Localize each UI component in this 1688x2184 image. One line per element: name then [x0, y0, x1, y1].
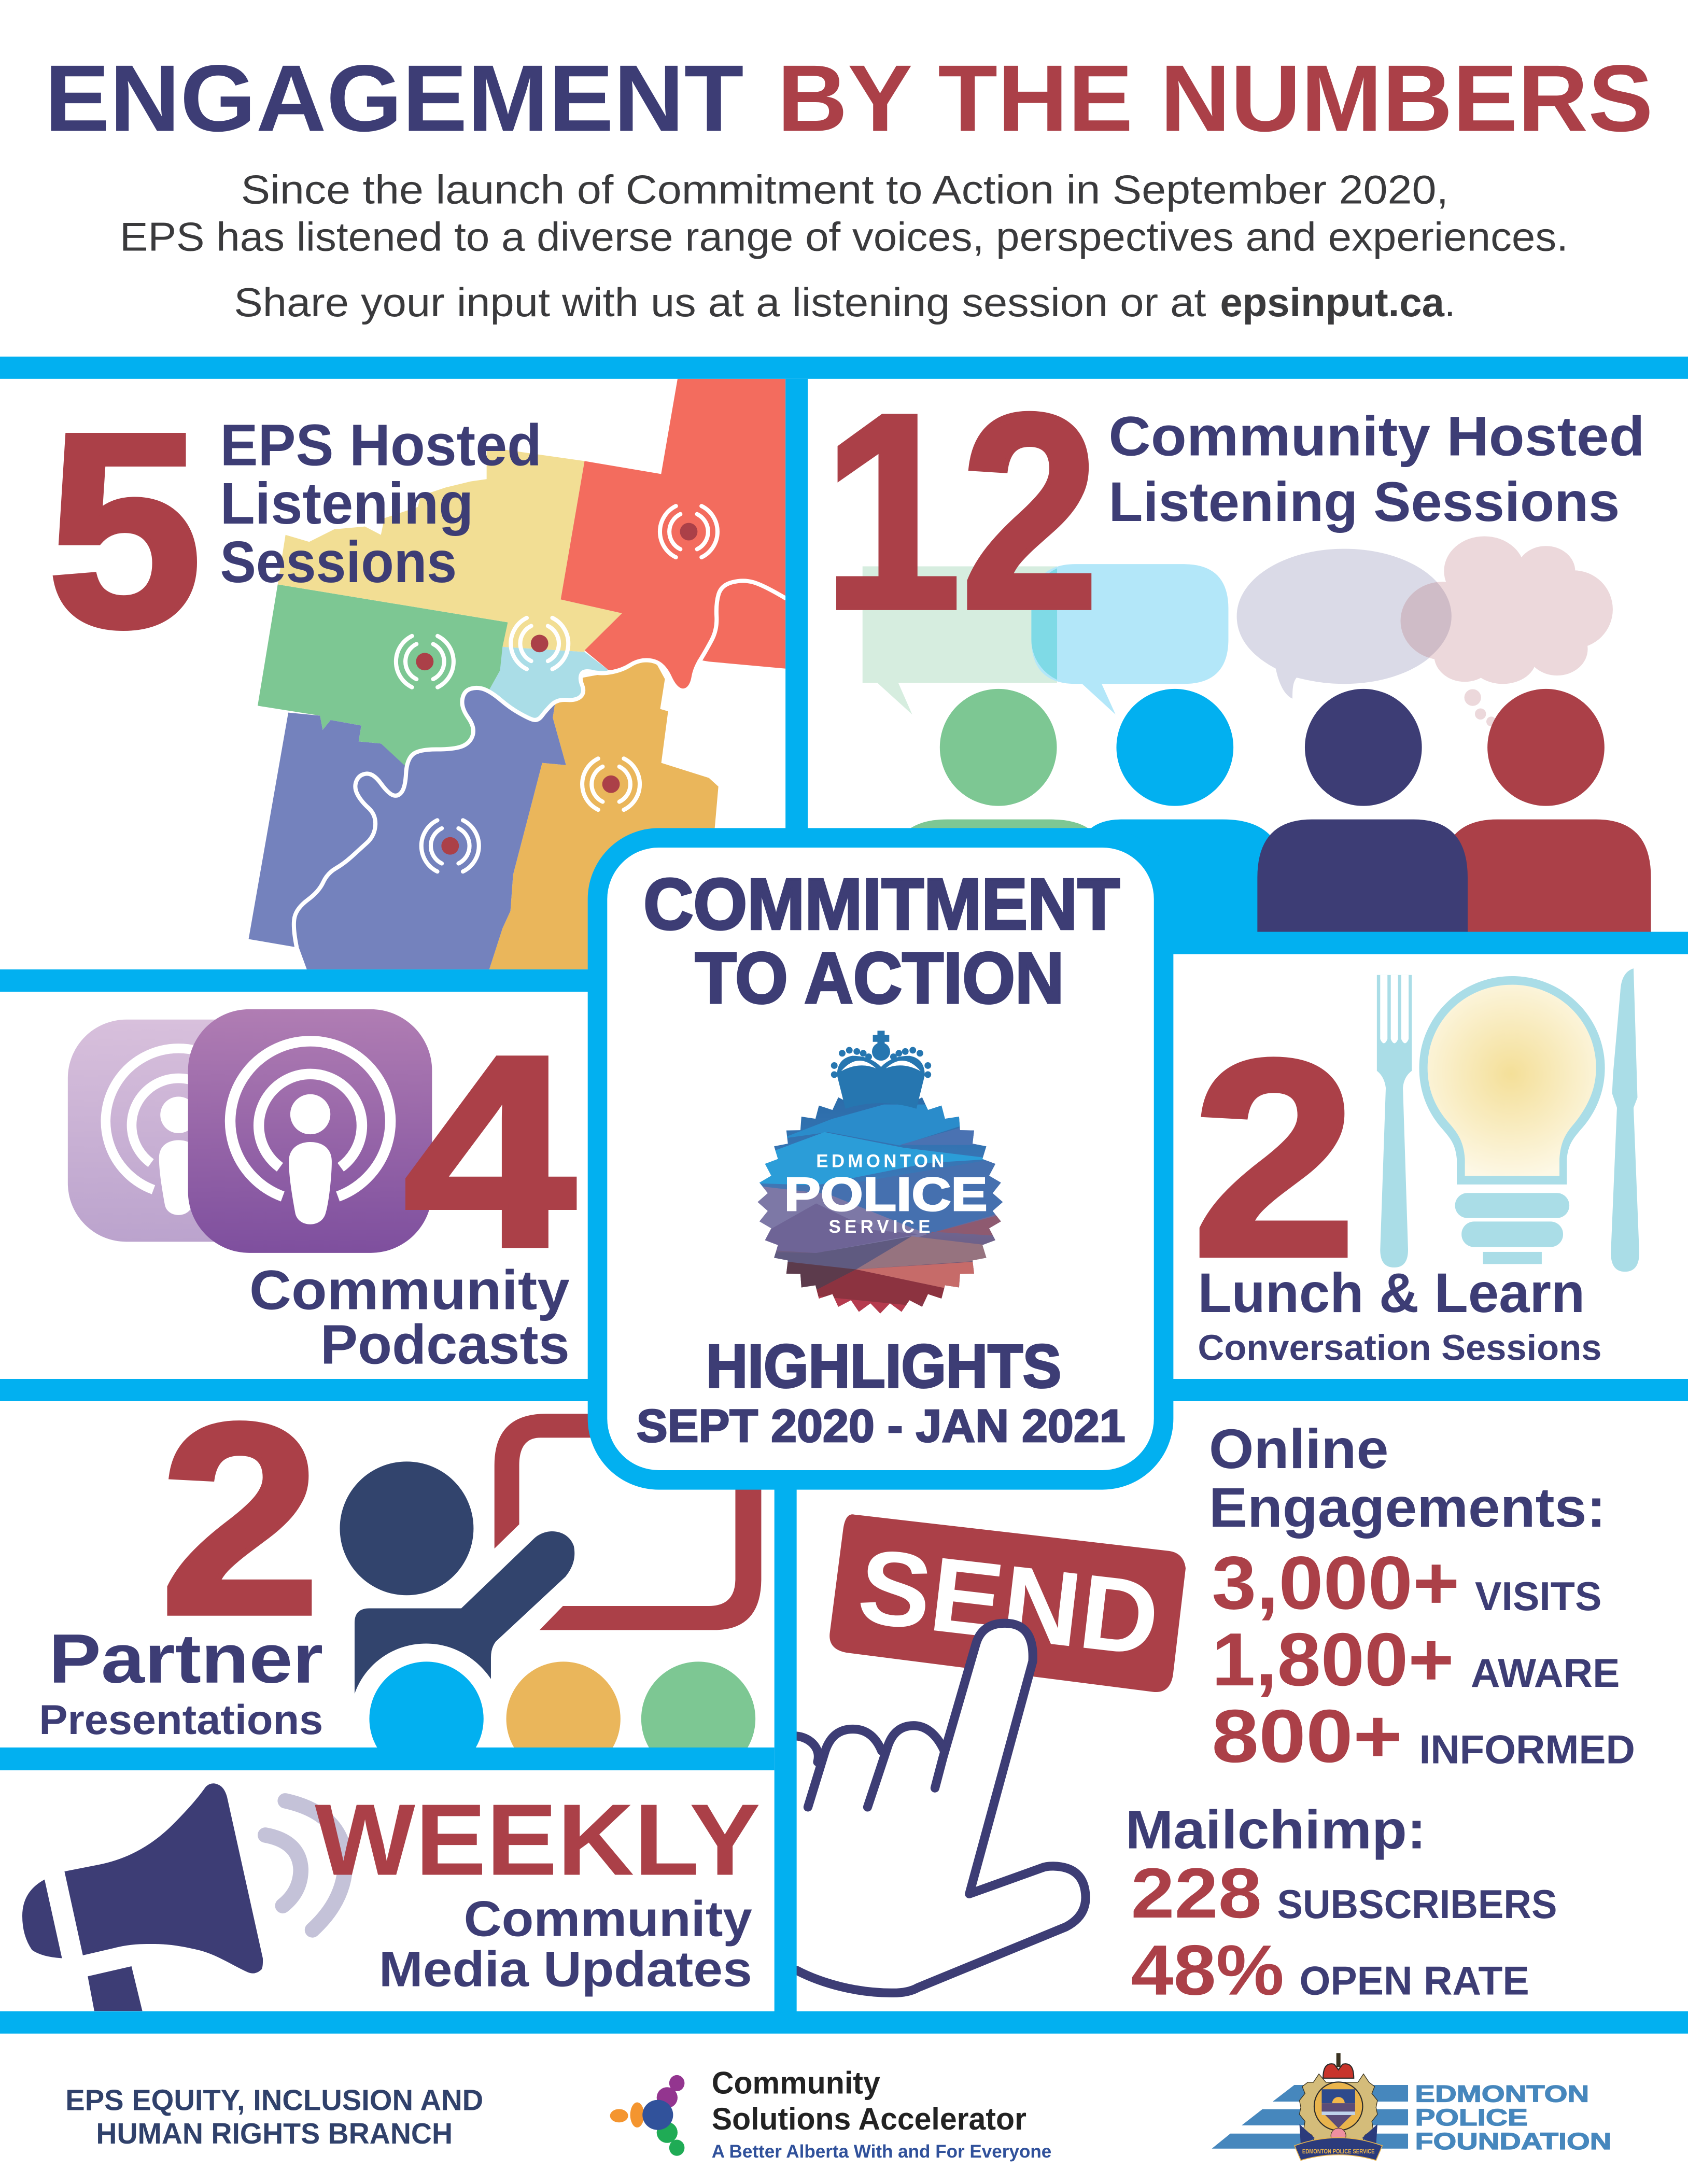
logo wordmark: SERVICE — [828, 1217, 931, 1237]
intro text: EPS has listened to a diverse range of voices, perspectives and experiences. — [120, 214, 1568, 260]
stat: subscribers: SUBSCRIBERS — [1277, 1881, 1557, 1927]
logo badge — [752, 1087, 1010, 1323]
number 4: 4 — [404, 1000, 577, 1303]
heading: online engagements: Engagements: — [1209, 1476, 1606, 1539]
intro text: Share your input with us at a listening session or at — [234, 279, 1206, 325]
river — [294, 581, 785, 947]
footer: EPS branch: EPS EQUITY, INCLUSION AND — [65, 2084, 483, 2117]
logo crown — [831, 1031, 931, 1109]
intro text: epsinput.ca — [1220, 279, 1445, 325]
footer: Community Solutions Accelerator logo — [610, 2065, 1051, 2162]
stat: aware — [1212, 1617, 1620, 1701]
panel: partner presentations — [41, 1414, 761, 1748]
label: EPS hosted listening sessions: Sessions — [220, 529, 457, 595]
intro text: Since the launch of Commitment to Action in September 2020, — [241, 166, 1448, 212]
logo wordmark — [784, 1151, 988, 1237]
heading: commitment to action — [643, 864, 1120, 1019]
label: EPS hosted listening sessions: EPS Hosted — [220, 412, 542, 477]
icon: presentation screen — [495, 1414, 761, 1630]
stat: aware: AWARE — [1471, 1650, 1620, 1696]
label: partner presentations — [39, 1620, 323, 1743]
label: partner presentations: Presentations — [39, 1697, 323, 1743]
title — [45, 46, 1653, 151]
label: community podcasts — [249, 1259, 570, 1375]
icon: location signal — [421, 820, 479, 871]
stat: visits — [1212, 1541, 1601, 1625]
panel: EPS hosted listening sessions — [47, 375, 785, 969]
stat: open rate: OPEN RATE — [1299, 1958, 1529, 2004]
icon: presenter — [340, 1461, 574, 1694]
number 12: 12 — [823, 357, 1099, 666]
title: BY THE NUMBERS — [777, 46, 1653, 151]
foundation stripes — [1212, 2085, 1408, 2149]
icon: send button: SEND — [852, 1527, 1165, 1679]
panel: community podcasts — [68, 1000, 577, 1375]
icon: lightbulb — [1419, 976, 1605, 1264]
people group — [891, 689, 1651, 933]
icon: location signal — [582, 758, 640, 810]
label: community hosted listening sessions: Community Hosted — [1108, 405, 1645, 468]
icon: podcast front — [188, 1009, 432, 1253]
icon: megaphone — [22, 1783, 345, 2011]
label: lunch and learn: Lunch & Learn — [1198, 1262, 1585, 1324]
icon: location signal — [511, 618, 568, 669]
icon: podcast back — [68, 1020, 313, 1242]
label: partner presentations: Partner — [49, 1620, 323, 1698]
foundation wordmark: EDMONTON — [1415, 2080, 1589, 2107]
label: community podcasts: Community — [249, 1259, 570, 1321]
label: community media updates: Community — [464, 1891, 752, 1947]
stat: open rate — [1131, 1931, 1529, 2010]
number 2: 2 — [1192, 1002, 1357, 1315]
label: weekly: WEEKLY — [315, 1783, 761, 1897]
stat: aware: 1,800+ — [1212, 1617, 1454, 1701]
number 2: 2 — [160, 1368, 320, 1671]
icon: pointing hand — [796, 1623, 1086, 1993]
label: EPS hosted listening sessions: Listening — [220, 471, 473, 536]
stat: subscribers — [1131, 1854, 1557, 1933]
footer: Edmonton Police Foundation logo — [1212, 2053, 1611, 2160]
intro text — [120, 166, 1568, 325]
heading: mailchimp: Mailchimp: — [1126, 1799, 1426, 1860]
panel: weekly media updates — [22, 1783, 761, 2011]
stat: informed: INFORMED — [1419, 1727, 1635, 1772]
foundation wordmark: FOUNDATION — [1415, 2128, 1611, 2154]
icon: location signal — [660, 506, 718, 557]
label: community media updates — [379, 1891, 752, 1997]
icon: knife — [1611, 968, 1639, 1272]
police crest: EDMONTON POLICE SERVICE — [1302, 2148, 1375, 2155]
label: community media updates: Media Updates — [379, 1941, 752, 1997]
date range: SEPT 2020 - JAN 2021 — [637, 1400, 1126, 1452]
divider bars — [0, 357, 1688, 2034]
logo: Edmonton Police Service — [752, 1031, 1010, 1323]
stat: subscribers: 228 — [1131, 1854, 1262, 1933]
icon: fork — [1377, 975, 1412, 1267]
stat: open rate: 48% — [1131, 1931, 1284, 2010]
intro text: . — [1444, 279, 1456, 325]
footer: Community Solutions Accelerator logo: A Better Alberta With and For Everyone — [712, 2141, 1051, 2162]
footer: EPS branch: HUMAN RIGHTS BRANCH — [96, 2117, 453, 2150]
stat: visits: VISITS — [1475, 1573, 1601, 1619]
label: community hosted listening sessions — [1108, 405, 1645, 533]
footer: Community Solutions Accelerator logo: Solutions Accelerator — [712, 2101, 1026, 2136]
heading: commitment to action: TO ACTION — [695, 938, 1064, 1019]
police crest — [1295, 2053, 1382, 2160]
label: EPS hosted listening sessions — [220, 412, 542, 595]
logo wordmark: EDMONTON — [816, 1151, 944, 1172]
logo mark — [610, 2075, 684, 2156]
heading: commitment to action: COMMITMENT — [643, 864, 1120, 945]
panel: community hosted listening sessions — [836, 411, 1651, 932]
label: community hosted listening sessions: Listening Sessions — [1108, 471, 1620, 533]
panel: lunch and learn — [1192, 968, 1639, 1368]
heading: online engagements: Online — [1209, 1418, 1388, 1480]
map of Edmonton divisions — [249, 379, 785, 969]
panel: commitment to action centre card — [597, 838, 1164, 1480]
footer: Community Solutions Accelerator logo: Community — [712, 2065, 880, 2100]
stat: visits: 3,000+ — [1212, 1541, 1459, 1625]
icon: audience — [369, 1661, 756, 1748]
footer: EPS branch — [65, 2084, 483, 2150]
foundation wordmark — [1415, 2080, 1611, 2154]
stat: informed: 800+ — [1212, 1694, 1402, 1778]
number 5: 5 — [47, 375, 202, 684]
logo wordmark: POLICE — [784, 1168, 988, 1221]
label: lunch and learn — [1198, 1262, 1601, 1368]
speech bubbles — [863, 536, 1613, 726]
panel: online engagements — [796, 1418, 1635, 2010]
label: community podcasts: Podcasts — [320, 1313, 570, 1375]
label: lunch and learn: Conversation Sessions — [1198, 1328, 1601, 1368]
title: ENGAGEMENT — [45, 46, 744, 151]
heading: online engagements — [1209, 1418, 1606, 1539]
foundation wordmark: POLICE — [1415, 2104, 1528, 2131]
heading: highlights: HIGHLIGHTS — [706, 1332, 1061, 1401]
stat: informed — [1212, 1694, 1635, 1778]
icon: location signal — [396, 636, 454, 687]
